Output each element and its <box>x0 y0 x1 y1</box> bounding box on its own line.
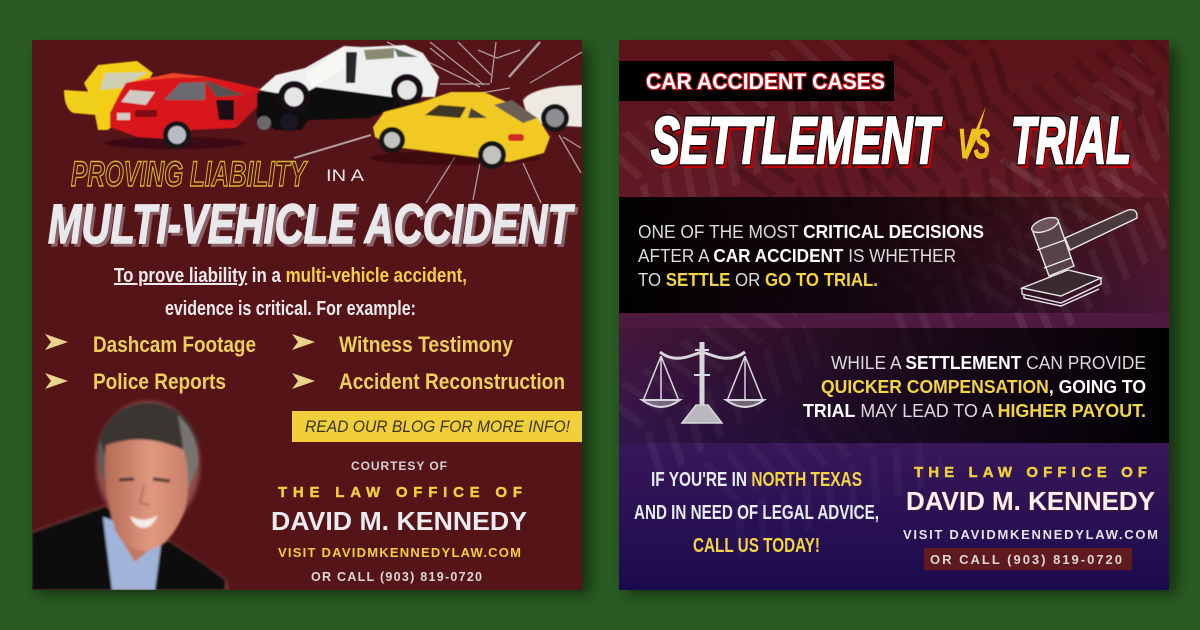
contact block: law office: THE LAW OFFICE OF <box>914 464 1147 481</box>
intro text: evidence is critical. For example: <box>165 298 416 320</box>
heading: proving liability in a: PROVING LIABILITY <box>71 155 308 194</box>
text: critical decision: AFTER A CAR ACCIDENT IS WHETHER <box>638 246 956 266</box>
heading: proving liability in a <box>70 160 364 187</box>
phone box: OR CALL (903) 819-0720 <box>930 552 1122 567</box>
shattered glass cracks <box>294 42 582 203</box>
evidence list: Accident Reconstruction <box>339 369 565 394</box>
car: yellow rear car <box>64 61 153 130</box>
heading: multi-vehicle accident: MULTI-VEHICLE ACCIDENT <box>48 192 575 255</box>
title: settlement vs trial: VS <box>958 120 990 167</box>
contact block: courtesy of: OR CALL (903) 819-0720 <box>311 570 482 584</box>
text: north texas call to action <box>634 469 879 557</box>
cars crash illustration <box>64 45 582 169</box>
title: settlement vs trial: SETTLEMENT <box>651 103 942 177</box>
text: settlement comparison: QUICKER COMPENSATION, GOING TO <box>821 377 1146 397</box>
title: settlement vs trial: SETTLEMENT <box>651 103 942 177</box>
evidence list <box>45 332 565 394</box>
contact block: law office <box>903 464 1158 570</box>
icon: scales of justice <box>642 342 764 423</box>
car: white right edge <box>523 85 582 132</box>
evidence list: Police Reports <box>93 369 226 394</box>
contact block: courtesy of: DAVID M. KENNEDY <box>271 506 527 536</box>
title: settlement vs trial: TRIAL <box>1011 103 1131 177</box>
text: settlement comparison: TRIAL MAY LEAD TO A HIGHER PAYOUT. <box>803 401 1146 421</box>
heading: proving liability in a: IN A <box>326 166 365 185</box>
text: north texas call to action: IF YOU'RE IN NORTH TEXAS <box>651 469 862 491</box>
text: critical decision: ONE OF THE MOST CRITICAL DECISIONS <box>638 222 984 242</box>
title: settlement vs trial: SETTLEMENT <box>654 107 945 181</box>
evidence list: Dashcam Footage <box>93 332 256 357</box>
contact block: law office: DAVID M. KENNEDY <box>906 486 1155 516</box>
label: car accident cases <box>619 61 894 101</box>
panel: settlement vs trial <box>619 40 1169 590</box>
text: north texas call to action: CALL US TODAY! <box>693 535 820 557</box>
contact block: courtesy of <box>271 459 527 584</box>
evidence list: Witness Testimony <box>339 332 514 357</box>
icon: gavel <box>1022 210 1137 306</box>
label: car accident cases: CAR ACCIDENT CASES <box>646 69 885 94</box>
heading: multi-vehicle accident <box>48 203 578 248</box>
text: north texas call to action: AND IN NEED OF LEGAL ADVICE, <box>634 502 879 524</box>
contact block: courtesy of: THE LAW OFFICE OF <box>278 484 522 501</box>
contact block: courtesy of: VISIT DAVIDMKENNEDYLAW.COM <box>278 545 521 560</box>
callout: read our blog: READ OUR BLOG FOR MORE INFO! <box>305 417 570 436</box>
car: yellow beetle <box>370 92 550 169</box>
phone box <box>924 548 1132 570</box>
band: settlement comparison <box>619 328 1169 443</box>
band: critical decision <box>619 197 1169 313</box>
text: critical decision: TO SETTLE OR GO TO TRIAL. <box>638 270 878 290</box>
text: critical decision <box>638 225 984 286</box>
heading: multi-vehicle accident: MULTI-VEHICLE ACCIDENT <box>51 195 578 258</box>
intro text: To prove liability in a multi-vehicle accident, <box>114 265 467 287</box>
text: settlement comparison <box>803 356 1146 417</box>
panel: proving liability <box>32 40 582 590</box>
title: settlement vs trial: TRIAL <box>1011 103 1131 177</box>
tire tread background <box>619 40 1169 478</box>
photo: attorney portrait <box>32 401 228 590</box>
car: white SUV on top <box>257 45 439 131</box>
text: settlement comparison: WHILE A SETTLEMENT CAN PROVIDE <box>831 353 1146 373</box>
car: red SUV <box>105 73 259 149</box>
contact block: law office: VISIT DAVIDMKENNEDYLAW.COM <box>903 527 1158 542</box>
contact block: courtesy of: COURTESY OF <box>351 459 447 473</box>
intro text <box>114 265 467 320</box>
callout: read our blog <box>292 411 582 442</box>
icon: arrow bullets <box>45 334 315 389</box>
